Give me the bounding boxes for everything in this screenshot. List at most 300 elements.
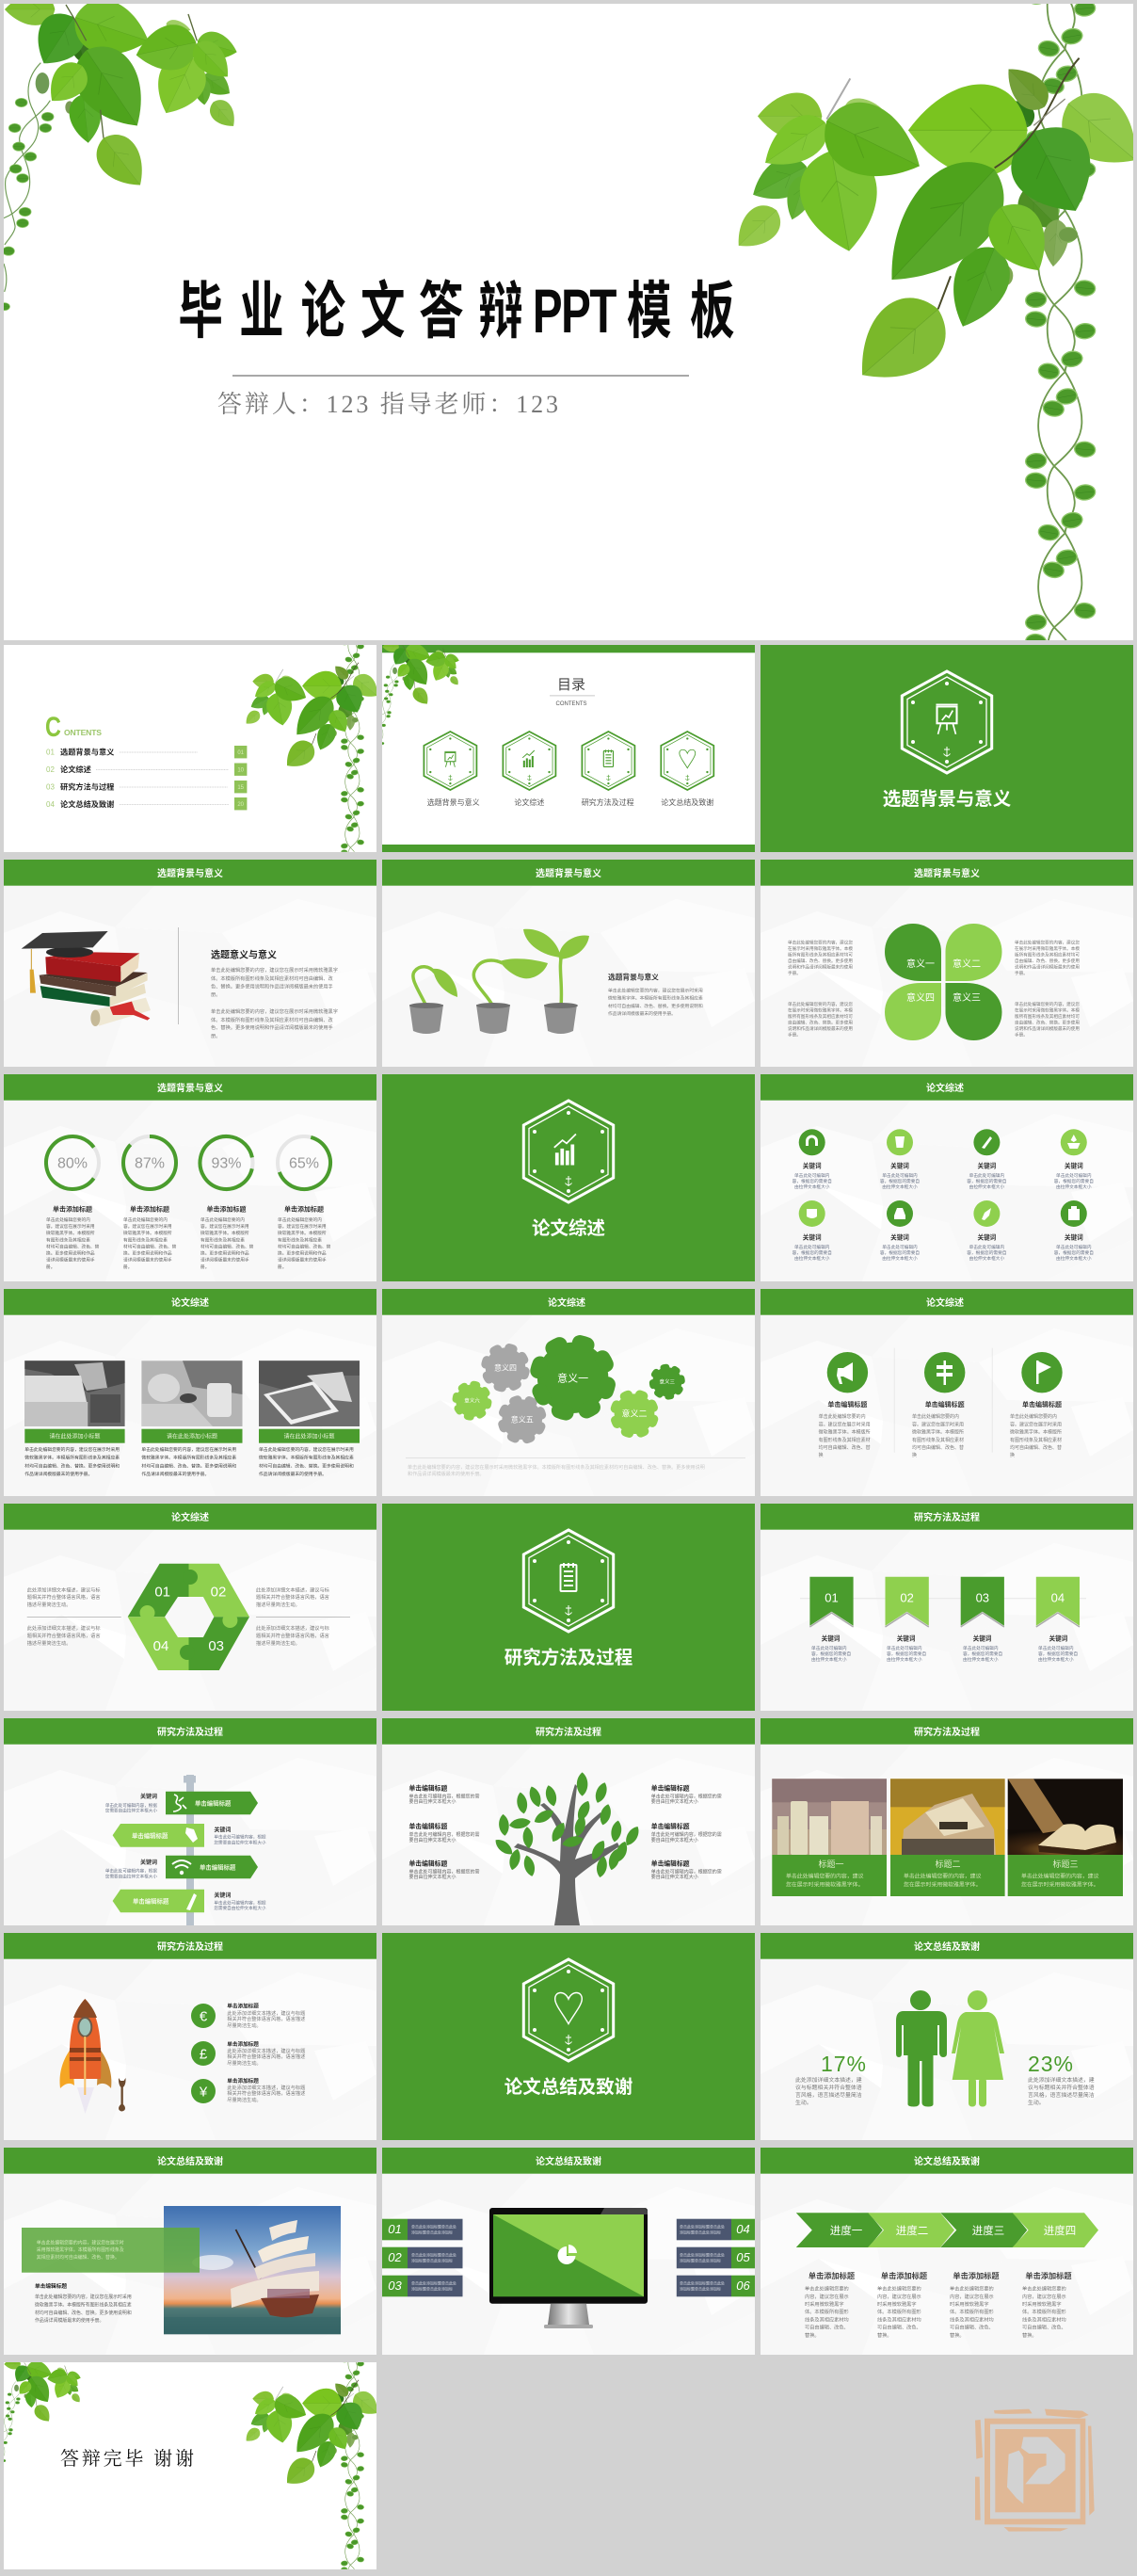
header: 研究方法及过程: [914, 1511, 980, 1523]
side text: 单击此处可编辑内容，根据您的需: [651, 1831, 722, 1838]
gear: 意义三: 意义三: [660, 1378, 676, 1386]
ring texts: 微软雅黑字体。本模版所: [200, 1230, 249, 1236]
paragraphs: 体。本模版所有图形线条及其相应素材均可自由编辑、改: [211, 1016, 334, 1023]
petal: 意义一: [885, 924, 941, 981]
keyword text: 单击此处可编辑内容，根据: [105, 1802, 157, 1809]
right label 06: 添加标题单击此处添加标: [680, 2286, 721, 2292]
keyword labels: 关键词: [978, 1233, 997, 1241]
column text: 单击此处编辑您要的: [1022, 2284, 1066, 2292]
ring texts: 材均可自由编辑、改色、替: [46, 1243, 100, 1250]
paragraphs: 色、替换。更多使用说明和作品请详阅模版最末的使用手: [211, 983, 333, 990]
header: 选题背景与意义: [536, 867, 601, 879]
keyword text: 您需要自由拉伸文本框大小: [214, 1905, 266, 1911]
column text: 时采用微软雅黑字: [805, 2300, 844, 2308]
photo: paper stack: [24, 1360, 125, 1426]
header: 论文总结及致谢: [914, 2155, 980, 2167]
section slide: 研究方法及过程: [382, 1504, 755, 1711]
panel text: 您在展示时采用微软雅黑字体。: [786, 1881, 863, 1889]
gear: 意义五: 意义五: [511, 1415, 534, 1425]
paragraph: 材均可自由编辑、改色、替换。更多使用说明和: [35, 2310, 132, 2316]
column headings: [827, 1400, 1062, 1409]
text blocks: 版所有图形线条及其相应素材均可: [1015, 1013, 1080, 1020]
ring: 80%: [36, 1126, 109, 1199]
contents rows: 20: [237, 802, 245, 808]
stat text right: 生动。: [1028, 2099, 1045, 2106]
ring texts: 单击此处编辑您要的内: [123, 1216, 168, 1223]
monitor: [489, 2208, 648, 2328]
column text: 微软雅黑字体。本模版所: [819, 1429, 871, 1435]
background: [4, 1504, 376, 1711]
arrow: dark 1: [166, 1792, 258, 1814]
header: 选题背景与意义: [157, 1082, 223, 1094]
column text: 容。建议您在展示时采用: [819, 1422, 871, 1427]
hexagon: 研究方法及过程: [582, 732, 634, 790]
left label 02: [382, 2247, 463, 2268]
text blocks: 单击此处编辑您要的内容，建议您: [788, 1001, 853, 1007]
slide: contents with C heading: [4, 600, 384, 869]
background: [761, 2148, 1133, 2355]
slide: monitor: [382, 2148, 755, 2355]
figure: man: [896, 1990, 947, 2107]
background: [4, 1933, 376, 2140]
stat text left: 言风格，语言描述尽量简洁: [795, 2091, 862, 2099]
item text: 尽量简洁生动。: [227, 2059, 262, 2067]
keyword labels: 关键词: [803, 1233, 822, 1241]
stat: 23%: 23%: [1028, 2052, 1073, 2076]
descriptions: 作品请详阅模版最末的使用手册。: [259, 1471, 327, 1477]
header: 研究方法及过程: [914, 1726, 980, 1738]
header: 论文综述: [548, 1296, 585, 1309]
gear: 意义三: [648, 1361, 687, 1402]
text blocks: 说明和作品请详阅模版最末的使用: [1015, 964, 1080, 970]
ribbon: 01: [809, 1577, 854, 1626]
keyword labels: 关键词: [822, 1634, 841, 1642]
background: [4, 1718, 376, 1925]
keyword labels: 关键词: [1049, 1634, 1068, 1642]
heading: CONTENTS: ONTENTS: [64, 728, 102, 737]
column text: 微软雅黑字体。本模版所: [1010, 1429, 1062, 1435]
ribbon: 04: 04: [1051, 1591, 1065, 1604]
hexagon badge: [523, 1530, 614, 1632]
keyword text: 由拉伸文本框大小: [811, 1656, 847, 1663]
ring texts: 册。: [46, 1264, 55, 1270]
column text: 替换。: [950, 2331, 965, 2339]
side text: 要自由拉伸文本框大小: [408, 1798, 456, 1805]
ring texts: [46, 1216, 331, 1270]
ring texts: 换。更多使用说明和作品: [123, 1250, 172, 1256]
photo: tablet on desk: [259, 1360, 360, 1426]
photo: mug on desk: [141, 1360, 243, 1426]
text blocks: 说明和作品请详阅模版最末的使用: [1015, 1025, 1080, 1032]
slide: color photos: [761, 1718, 1133, 1925]
column headings: 单击添加标题: [1025, 2271, 1072, 2280]
header: 论文总结及致谢: [914, 1940, 980, 1953]
left label 03: [382, 2276, 463, 2296]
header: 论文总结及致谢: [536, 2155, 601, 2167]
keyword texts: 单击此处可编辑内: [969, 1244, 1004, 1250]
paragraph: [35, 2294, 132, 2324]
header: [761, 1718, 1133, 1745]
header: 选题背景与意义: [157, 867, 223, 879]
keyword text: 单击此处可编辑内: [963, 1645, 999, 1651]
left label 01: 添加标题单击此处添加标: [411, 2230, 453, 2235]
slide: signpost: [4, 1718, 376, 1925]
slide: clover: [761, 860, 1133, 1067]
keyword text: 您需要自由拉伸文本框大小: [214, 1839, 266, 1845]
keyword labels: [803, 1162, 1083, 1241]
contents rows: 02: [46, 765, 55, 774]
petal labels: [906, 958, 981, 1004]
text blocks: 此处添加详细文本描述，建议与标: [27, 1624, 101, 1632]
item headings: [227, 2002, 259, 2085]
ring texts: 单击此处编辑您要的内: [278, 1216, 322, 1223]
box text: [37, 2239, 124, 2261]
background: [761, 1289, 1133, 1496]
panel titles: [818, 1859, 1079, 1869]
slide: tree: [382, 1718, 755, 1925]
connector line: [800, 1597, 1086, 1600]
column text: 可自由编辑、改色、: [950, 2324, 994, 2331]
keyword text: 单击此处可编辑内: [811, 1645, 847, 1651]
chevron: 进度二: [868, 2213, 954, 2247]
keyword texts: 容，根据您的需要自: [967, 1249, 1007, 1256]
column headings: 单击编辑标题: [925, 1400, 965, 1409]
title: 毕业论文答辩PPT模板: [178, 277, 734, 346]
column text: 单击此处编辑您要的: [805, 2284, 849, 2292]
column text: 时采用微软雅黑字: [877, 2300, 917, 2308]
header: [761, 1504, 1133, 1530]
keyword text: 容，根据您的需要自: [1038, 1650, 1078, 1657]
panel text: [786, 1872, 1099, 1889]
paragraphs: 色、替换。更多使用说明和作品请详阅模版最末的使用手: [211, 1023, 333, 1031]
ring texts: 容。建议您在展示时采用: [200, 1223, 249, 1230]
right label 05: [677, 2247, 755, 2268]
ring headings: 单击添加标题: [207, 1205, 247, 1213]
leaves decoration: [380, 641, 460, 745]
keyword labels: 关键词: [890, 1162, 909, 1169]
header: [761, 1933, 1133, 1959]
tree illustration: [492, 1772, 642, 1925]
ring texts: 请详阅模版最末的使用手: [200, 1256, 249, 1264]
ring texts: 册。: [278, 1264, 286, 1270]
keyword text: 由拉伸文本框大小: [963, 1656, 999, 1663]
translucent green text box: [22, 2228, 200, 2273]
side titles: 单击编辑标题: [651, 1859, 690, 1868]
ring texts: 换。更多使用说明和作品: [278, 1250, 327, 1256]
text blocks: 自由编辑、改色、替换。更多使用: [1015, 958, 1080, 964]
leaves decoration right: [242, 2317, 384, 2576]
keyword text: [811, 1645, 1078, 1663]
text blocks: [27, 1586, 329, 1647]
right label 06: 06: [736, 2278, 750, 2293]
keyword texts: [793, 1172, 1094, 1262]
photo: ship at sea: [164, 2206, 341, 2334]
keyword text: [105, 1802, 266, 1911]
text blocks: 自由编辑、改色、替换。更多使用: [788, 1019, 853, 1026]
header: 研究方法及过程: [536, 1726, 601, 1738]
header: [4, 1718, 376, 1745]
hexagon labels: 论文综述: [514, 797, 544, 807]
currency icon: yen: [191, 2079, 216, 2103]
panel titles: 标题三: [1052, 1859, 1079, 1869]
section title: 选题背景与意义: [883, 788, 1012, 810]
keywords: [140, 1793, 231, 1899]
description: [408, 1464, 705, 1477]
keyword text: 单击此处可编辑内容，根据: [105, 1868, 157, 1875]
vertical divider: [177, 927, 180, 1024]
hexagon badge: [523, 1959, 614, 2061]
slide: keyword icons grid: [761, 1074, 1133, 1281]
header: [761, 1074, 1133, 1101]
ring texts: 微软雅黑字体。本模版所: [278, 1230, 327, 1236]
contents rows: 04: [46, 800, 55, 809]
paragraph: 微软雅黑字体。本模版所有图形线条及其相应素: [35, 2301, 132, 2309]
currency icon: pound: £: [200, 2047, 208, 2062]
side text: 要自由拉伸文本框大小: [651, 1798, 698, 1805]
keyword texts: 容，根据您的需要自: [793, 1178, 832, 1184]
side text: 单击此处可编辑内容，根据您的需: [408, 1793, 480, 1800]
ring texts: 单击此处编辑您要的内: [46, 1216, 90, 1223]
item text: 此处添加详细文本描述，建议与标题: [227, 2084, 305, 2091]
currency icon: euro: €: [200, 2009, 208, 2024]
text blocks: 单击此处编辑您要的内容，建议您: [788, 940, 853, 945]
stat: 17%: 17%: [821, 2052, 866, 2076]
ring texts: 材均可自由编辑、改色、替: [200, 1243, 254, 1250]
keywords: 关键词: [214, 1827, 231, 1834]
arrow: dark 3: [166, 1856, 258, 1878]
text blocks: 手册。: [788, 1032, 801, 1038]
contents rows: 01: [237, 750, 245, 756]
ribbon: 02: 02: [900, 1591, 914, 1604]
arrow: light 4: 单击编辑标题: [133, 1896, 169, 1906]
contents rows: 15: [237, 785, 245, 791]
chevron: 进度二: 进度二: [896, 2224, 928, 2237]
slide: male/female stats: [761, 1933, 1133, 2140]
ring: 65%: 65%: [289, 1156, 319, 1171]
column headings: 单击添加标题: [881, 2271, 927, 2280]
ring texts: 微软雅黑字体。本模版所: [46, 1230, 95, 1236]
currency icon: euro: [191, 2004, 216, 2028]
column text: 时采用微软雅黑字: [1022, 2300, 1062, 2308]
description: 和作品请详阅模版最末的使用手册。: [408, 1471, 485, 1477]
heading: CONTENTS: [45, 711, 102, 743]
ring texts: 容。建议您在展示时采用: [123, 1223, 172, 1230]
column text: 均可自由编辑、改色、替: [819, 1444, 871, 1451]
ring: 65%: [272, 1131, 336, 1195]
slide: plants: [382, 860, 755, 1067]
keyword texts: 容，根据您的需要自: [967, 1178, 1007, 1184]
column text: 单击此处编辑您要的内: [912, 1413, 959, 1420]
background: [4, 1074, 376, 1281]
column text: 单击此处编辑您要的内: [819, 1413, 866, 1420]
ring texts: 有图形线条及其相应素: [46, 1237, 90, 1243]
paragraph: 单击此处编辑您要的内容，建议您在展示时采用: [35, 2294, 132, 2300]
box text: 其相应素材均可自由编辑、改色、替换。: [37, 2254, 120, 2261]
column text: 换: [912, 1452, 917, 1458]
section slide: 选题背景与意义: [761, 645, 1133, 852]
gear: 意义六: 意义六: [464, 1397, 480, 1405]
text blocks: 描述尽量简洁生动。: [27, 1601, 71, 1608]
text blocks: 题相关并符合整体语言风格，语言: [256, 1593, 329, 1601]
keyword labels: 关键词: [890, 1233, 909, 1241]
keyword labels: 关键词: [973, 1634, 992, 1642]
ring headings: 单击添加标题: [284, 1205, 324, 1213]
ring: 93%: [195, 1131, 258, 1195]
subtitle: 答辩人：123 指导老师：123: [217, 391, 558, 418]
ribbon: 03: [961, 1577, 1004, 1626]
descriptions: 材均可自由编辑、改色、替换。更多使用说明和: [141, 1463, 236, 1469]
stat text right: 言风格，语言描述尽量简洁: [1028, 2091, 1095, 2099]
plant illustration: [409, 929, 589, 1034]
header: [382, 1718, 755, 1745]
keyword texts: 单击此处可编辑内: [1056, 1172, 1092, 1179]
gear: 意义一: 意义一: [557, 1371, 588, 1384]
keyword texts: 单击此处可编辑内: [794, 1172, 830, 1179]
chevron: 进度四: [1013, 2213, 1098, 2247]
paragraph: 作品请详阅模版最末的使用手册。: [35, 2317, 104, 2324]
section slide: 论文总结及致谢: [382, 1933, 755, 2140]
column text: 可自由编辑、改色、: [1022, 2324, 1066, 2331]
hexagon: 选题背景与意义: [424, 732, 476, 790]
caption text: 请在此处添加小标题: [283, 1433, 335, 1441]
panel text: 您在展示时采用微软雅黑字体。: [1021, 1881, 1098, 1889]
paragraph: 微软雅黑字体。本模版所有图形线条及其相应素: [608, 994, 703, 1002]
ring texts: 请详阅模版最末的使用手: [123, 1256, 172, 1264]
slide background: [4, 645, 376, 852]
column text: 体。本模版所有图形: [805, 2308, 850, 2315]
text blocks: 自由编辑、改色、替换。更多使用: [788, 958, 853, 964]
ring texts: 有图形线条及其相应素: [200, 1237, 245, 1243]
background: [382, 1718, 755, 1925]
side titles: [408, 1783, 690, 1868]
ring headings: 单击添加标题: [130, 1205, 169, 1213]
keyword text: 单击此处可编辑内容，根据: [214, 1899, 266, 1906]
header: [4, 1289, 376, 1315]
icon: wrench: [119, 2078, 126, 2111]
photo: glowing open book: [1008, 1779, 1123, 1856]
chevron: 进度一: 进度一: [830, 2224, 863, 2237]
right label 05: 单击此处添加标题单击此处: [680, 2252, 725, 2258]
column text: 可自由编辑、改色、: [805, 2324, 849, 2331]
ring texts: 材均可自由编辑、改色、替: [278, 1243, 331, 1250]
hero slide: cover: [0, 0, 1137, 695]
background: [382, 1933, 755, 2140]
keywords: 关键词: [214, 1892, 231, 1899]
dividers: [27, 1616, 350, 1618]
side text: 单击此处可编辑内容，根据您的需: [408, 1868, 480, 1876]
column headings: [809, 2271, 1072, 2280]
figure: woman: [952, 1990, 1004, 2107]
keyword texts: 由拉伸文本框大小: [969, 1183, 1004, 1190]
panel titles: 标题二: [935, 1859, 961, 1869]
slide: 目录: [380, 641, 755, 852]
ribbon: 01: 01: [825, 1591, 839, 1604]
hexagon badge: [523, 1101, 614, 1202]
hero background: [4, 4, 1133, 640]
left label 01: [382, 2219, 463, 2240]
keyword text: 单击此处可编辑内: [1038, 1645, 1074, 1651]
slide background: [382, 645, 755, 852]
hexagon labels: 论文总结及致谢: [661, 797, 713, 807]
hexagon labels: [427, 797, 713, 807]
descriptions: 作品请详阅模版最末的使用手册。: [141, 1471, 209, 1477]
column text: 替换。: [805, 2331, 820, 2339]
text blocks: 手册。: [1015, 1032, 1028, 1038]
text blocks: 此处添加详细文本描述，建议与标: [256, 1624, 329, 1632]
paragraph: [608, 987, 703, 1017]
keyword texts: 容，根据您的需要自: [1054, 1249, 1094, 1256]
background: [761, 645, 1133, 852]
item headings: 单击添加标题: [227, 2077, 259, 2085]
puzzle diagram: [128, 1564, 249, 1670]
chevron: 进度三: 进度三: [972, 2224, 1004, 2237]
keyword texts: 由拉伸文本框大小: [794, 1255, 830, 1262]
column text: 容。建议您在展示时采用: [1010, 1422, 1062, 1427]
ribbon shadows: [809, 1613, 1080, 1627]
header: 论文总结及致谢: [157, 2155, 223, 2167]
left label 03: 添加标题单击此处添加标: [411, 2286, 453, 2292]
keyword texts: 容，根据您的需要自: [880, 1178, 920, 1184]
arrow: light 2: [113, 1824, 204, 1847]
stat text right: 议与标题相关并符合整体语: [1028, 2084, 1095, 2091]
column headings: 单击添加标题: [809, 2271, 855, 2280]
chevron: 进度一: [796, 2213, 883, 2247]
ring texts: 册。: [200, 1264, 209, 1270]
keyword texts: 单击此处可编辑内: [1056, 1244, 1092, 1250]
petal: 意义二: [945, 924, 1001, 981]
arrow: light 2: 单击编辑标题: [132, 1831, 168, 1840]
header: [4, 1933, 376, 1959]
section slide: 论文综述: [382, 1074, 755, 1281]
text blocks: 描述尽量简洁生动。: [27, 1639, 71, 1647]
slide: sailing ship: [4, 2148, 376, 2355]
panel titles: 标题一: [818, 1859, 844, 1869]
contents rows: 研究方法与过程: [60, 781, 114, 791]
item text: 相关并符合整体语言风格，语言描述: [227, 2053, 305, 2060]
ring texts: 容。建议您在展示时采用: [46, 1223, 95, 1230]
paragraphs: 体。本模版所有图形线条及其相应素材均可自由编辑、改: [211, 974, 334, 982]
header: [382, 2148, 755, 2174]
keyword labels: [822, 1634, 1068, 1642]
icon circles row 1: [799, 1129, 1087, 1155]
gear: 意义四: [482, 1344, 529, 1391]
puzzle diagram: 02: [211, 1584, 226, 1601]
column text: 微软雅黑字体。本模版所: [912, 1429, 964, 1435]
text blocks: 手册。: [788, 970, 801, 976]
panel text: 单击此处编辑您要的内容，建议: [786, 1872, 864, 1879]
text blocks: 版所有图形线条及其相应素材均可: [788, 951, 853, 958]
keyword texts: 单击此处可编辑内: [882, 1244, 918, 1250]
ribbon: 04: [1036, 1577, 1080, 1626]
left label 03: 单击此处添加标题单击此处: [411, 2280, 456, 2286]
side titles: 单击编辑标题: [651, 1783, 690, 1793]
text blocks: 说明和作品请详阅模版最末的使用: [788, 964, 853, 970]
right label 06: 单击此处添加标题单击此处: [680, 2280, 725, 2286]
column text: 可自由编辑、改色、: [877, 2324, 921, 2331]
column text: 体。本模版所有图形: [1022, 2308, 1067, 2315]
caption text: 请在此处添加小标题: [49, 1433, 101, 1441]
caption text: [49, 1433, 335, 1441]
right label 05: 05: [736, 2250, 750, 2264]
column text: 有图形线条及其相应素材: [912, 1437, 964, 1443]
header: 论文综述: [926, 1296, 964, 1309]
text blocks: 单击此处编辑您要的内容，建议您: [1015, 1001, 1080, 1007]
item text: 尽量简洁生动。: [227, 2096, 262, 2103]
keyword labels: 关键词: [978, 1162, 997, 1169]
keyword texts: 容，根据您的需要自: [793, 1249, 832, 1256]
background: [761, 860, 1133, 1067]
box text: 单击此处编辑您要的内容，建议您在展示时: [37, 2239, 124, 2246]
